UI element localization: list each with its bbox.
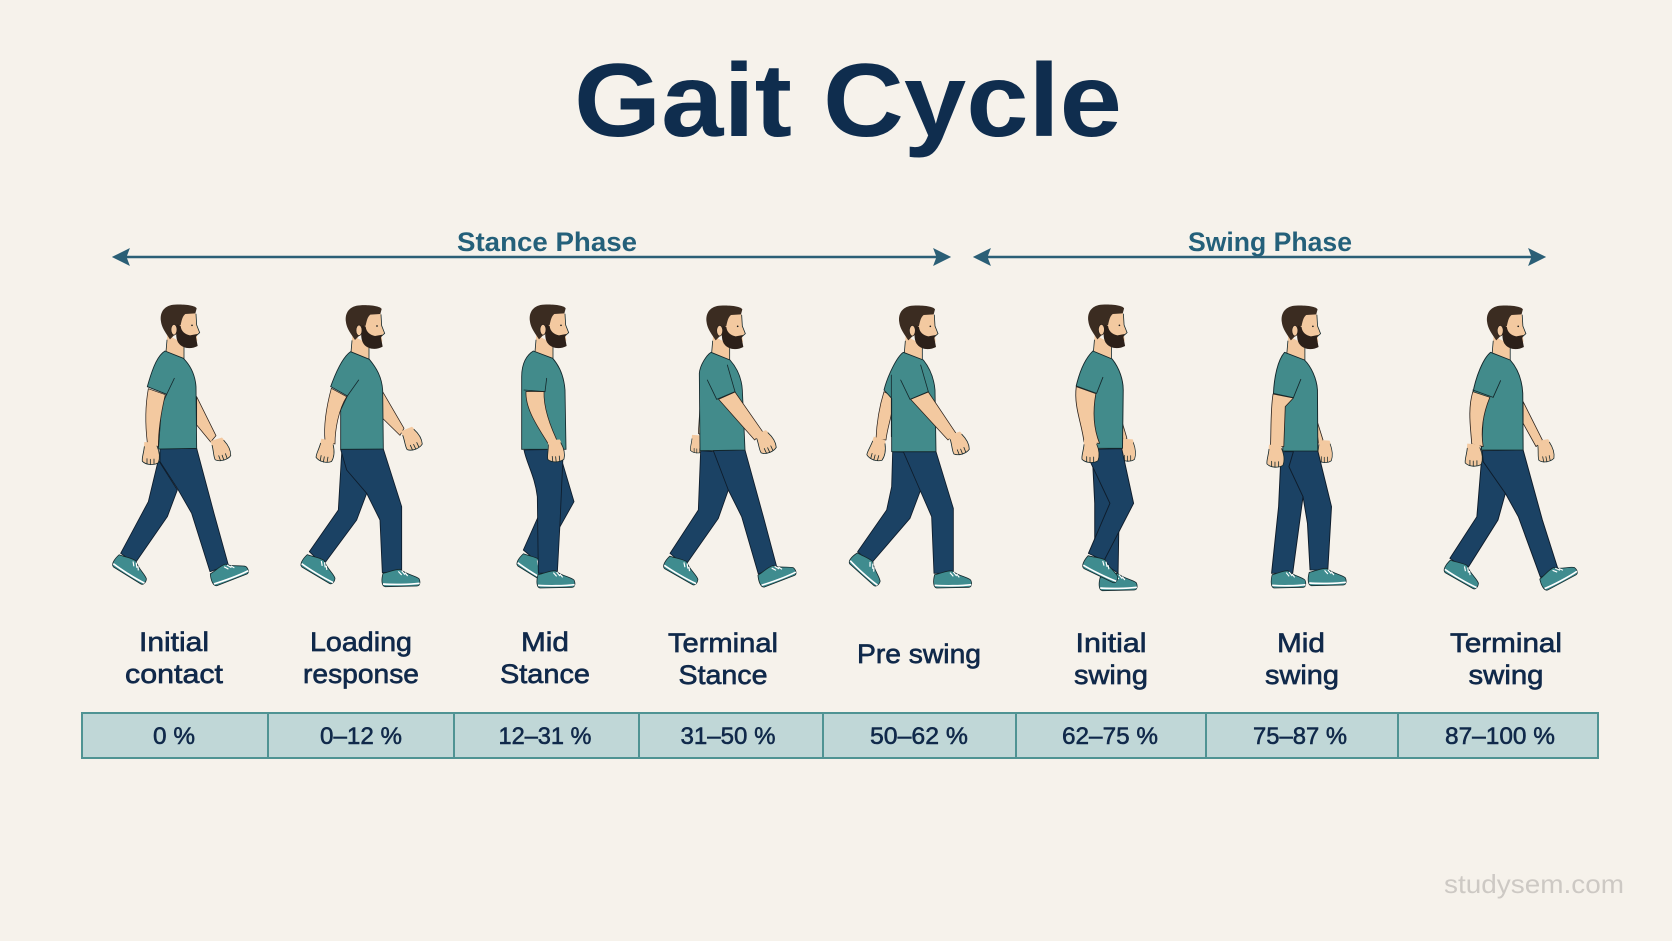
label: mid stance bbox=[500, 627, 590, 689]
percentage table: 0 % bbox=[153, 723, 195, 750]
label: mid stance: Mid bbox=[521, 627, 569, 657]
label: initial contact bbox=[125, 627, 224, 689]
label: terminal swing: swing bbox=[1468, 660, 1544, 690]
percentage table: 31–50 % bbox=[680, 723, 776, 750]
heading: swing phase: Swing Phase bbox=[1188, 227, 1352, 257]
label: mid swing: swing bbox=[1265, 660, 1339, 690]
arrow: swing phase span bbox=[974, 249, 1545, 265]
figure: mid stance bbox=[515, 304, 575, 588]
label: loading response bbox=[303, 627, 419, 689]
label: loading response: Loading bbox=[310, 627, 412, 657]
figure: pre swing bbox=[848, 305, 972, 588]
percentage table: 12–31 % bbox=[498, 723, 592, 750]
label: initial swing: swing bbox=[1074, 660, 1148, 690]
label: terminal stance: Stance bbox=[678, 660, 768, 690]
label: terminal stance: Terminal bbox=[668, 628, 778, 658]
label: mid swing bbox=[1265, 628, 1339, 690]
label: initial contact: contact bbox=[125, 659, 224, 689]
figure: terminal swing bbox=[1443, 305, 1579, 591]
label: loading response: response bbox=[303, 659, 419, 689]
label: terminal stance bbox=[668, 628, 778, 690]
label: terminal swing bbox=[1450, 628, 1562, 690]
label: pre swing: Pre swing bbox=[857, 639, 981, 669]
watermark: studysem.com bbox=[1444, 869, 1624, 899]
figure: mid swing bbox=[1267, 305, 1346, 588]
title: Gait Cycle bbox=[574, 43, 1122, 159]
figure: initial swing bbox=[1076, 304, 1137, 591]
heading: stance phase: Stance Phase bbox=[457, 227, 637, 257]
label: terminal swing: Terminal bbox=[1450, 628, 1562, 658]
figure: loading response bbox=[299, 305, 424, 587]
percentage table: 0–12 % bbox=[320, 723, 402, 750]
percentage table: 50–62 % bbox=[870, 723, 968, 750]
percentage table: 75–87 % bbox=[1253, 723, 1347, 750]
percentage table bbox=[82, 713, 1598, 758]
arrow: stance phase span bbox=[113, 249, 950, 265]
percentage table: 62–75 % bbox=[1062, 723, 1158, 750]
label: mid stance: Stance bbox=[500, 659, 590, 689]
label: initial swing: Initial bbox=[1076, 628, 1146, 658]
label: initial contact: Initial bbox=[139, 627, 209, 657]
percentage table: 87–100 % bbox=[1445, 723, 1555, 750]
figure: terminal stance bbox=[662, 305, 797, 588]
label: mid swing: Mid bbox=[1277, 628, 1325, 658]
label: initial swing bbox=[1074, 628, 1148, 690]
figure: initial contact bbox=[111, 304, 250, 587]
